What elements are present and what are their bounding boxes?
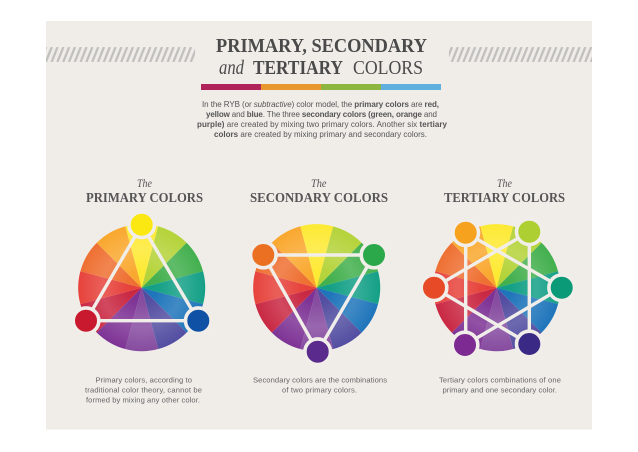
heading: tertiary colors: TERTIARY COLORS xyxy=(444,190,565,205)
colour wheel: secondary xyxy=(250,224,387,365)
node: yellow xyxy=(129,212,154,238)
caption: secondary: of two primary colors. xyxy=(282,386,357,394)
node: red-orange xyxy=(421,275,447,301)
colour bar xyxy=(201,84,441,90)
node: green xyxy=(361,242,387,268)
intro paragraph: colors are created by mixing primary and secondary colors. xyxy=(214,130,427,139)
heading: tertiary colors xyxy=(444,176,565,205)
heading: primary colors: The xyxy=(137,176,153,190)
tertiary star lines xyxy=(434,232,562,345)
node: yellow-orange xyxy=(453,220,479,246)
caption: primary: traditional color theory, cannot be xyxy=(85,386,202,394)
heading: tertiary colors: The xyxy=(497,176,513,190)
intro paragraph: In the RYB (or subtractive) color model, the primary colors are red, xyxy=(202,100,439,109)
title: PRIMARY, SECONDARY xyxy=(216,35,428,57)
colour wheel: primary xyxy=(73,212,211,351)
left decorative stripes xyxy=(46,47,195,62)
caption: tertiary xyxy=(439,376,561,394)
heading: secondary colors: SECONDARY COLORS xyxy=(250,190,388,205)
intro paragraph: purple) are created by mixing two primary colors. Another six tertiary xyxy=(197,120,448,129)
node: purple xyxy=(305,339,331,365)
node: blue-green xyxy=(549,275,574,301)
caption: tertiary: Tertiary colors combinations of one xyxy=(439,376,561,384)
caption: secondary: Secondary colors are the combinations xyxy=(253,376,387,384)
caption: secondary xyxy=(253,376,387,394)
title: COLORS xyxy=(353,57,423,79)
title: TERTIARY xyxy=(253,57,343,79)
caption: primary xyxy=(85,376,202,404)
heading: secondary colors xyxy=(250,176,388,205)
caption: primary: formed by mixing any other color. xyxy=(86,396,200,404)
secondary triangle xyxy=(263,255,374,352)
node: yellow-green xyxy=(516,219,542,244)
heading: secondary colors: The xyxy=(311,176,327,190)
caption: tertiary: primary and one secondary color. xyxy=(442,386,557,394)
heading: primary colors: PRIMARY COLORS xyxy=(86,190,203,205)
title xyxy=(216,35,428,79)
heading: primary colors xyxy=(86,176,203,205)
node: orange xyxy=(250,242,276,268)
intro paragraph: yellow and blue. The three secondary colors (green, orange and xyxy=(206,110,437,119)
node: red-purple xyxy=(452,332,478,358)
colour wheel: tertiary xyxy=(421,219,574,358)
title: and xyxy=(219,57,245,79)
background panel xyxy=(46,21,592,430)
right decorative stripes xyxy=(449,47,592,62)
intro paragraph xyxy=(197,100,448,139)
primary triangle xyxy=(86,225,198,321)
node: blue xyxy=(186,308,211,334)
caption: primary: Primary colors, according to xyxy=(96,376,192,384)
node: red xyxy=(73,308,99,334)
node: blue-purple xyxy=(516,331,542,357)
